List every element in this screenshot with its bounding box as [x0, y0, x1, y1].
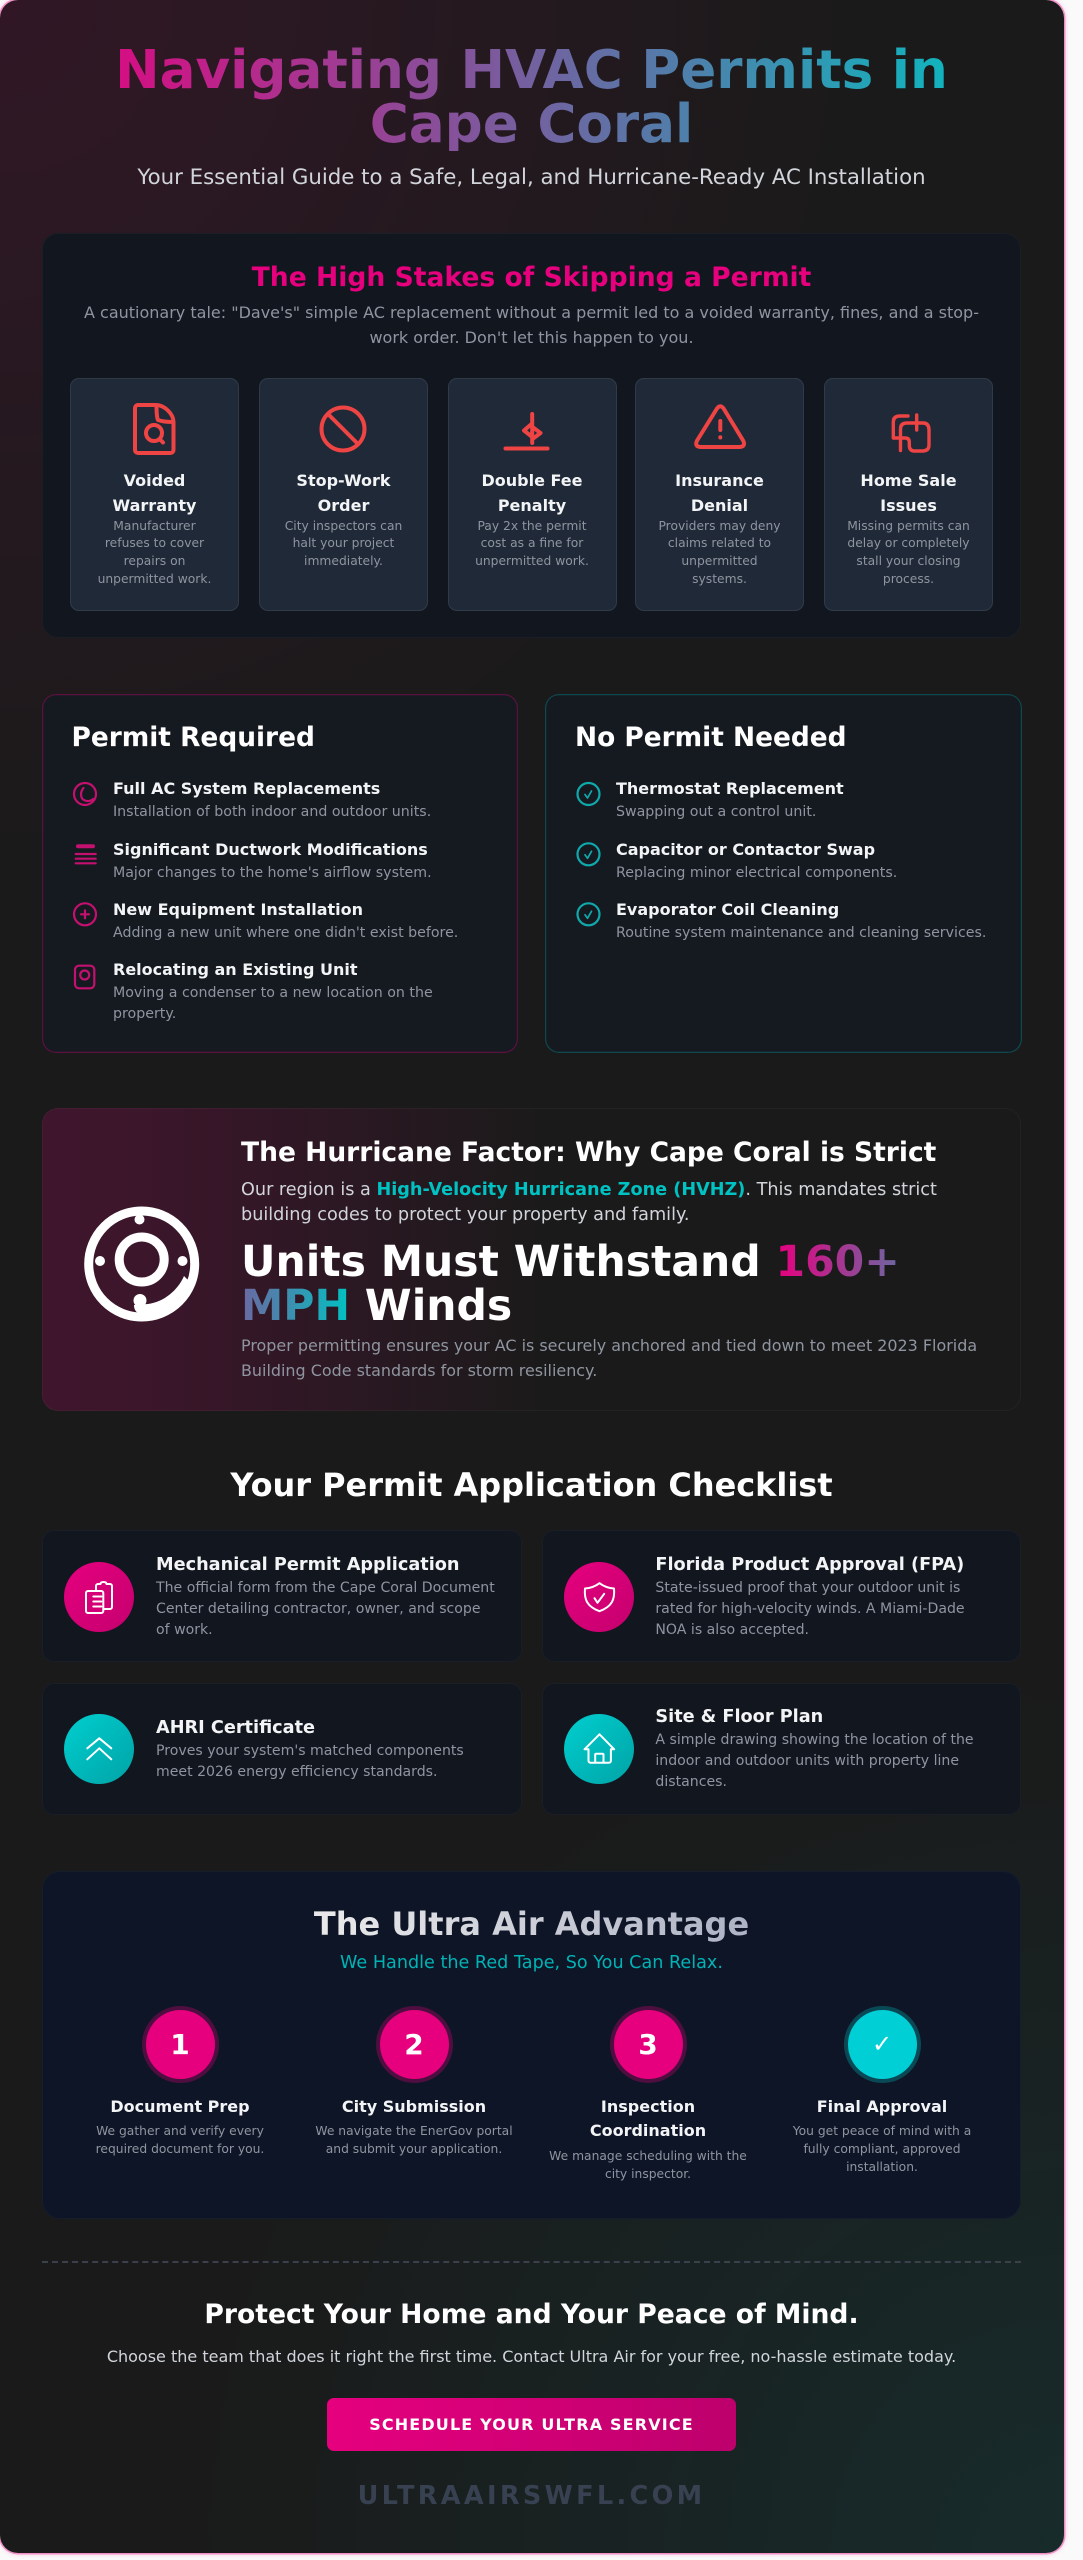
- card title: Penalty: [498, 496, 566, 514]
- card text: cost as a fine for: [481, 536, 583, 550]
- intro text: work order. Don't let this happen to you.: [369, 328, 694, 347]
- card text: indoor and outdoor units with property line: [655, 1753, 959, 1769]
- card title: [296, 470, 391, 514]
- card title: AHRI Certificate: [156, 1718, 315, 1738]
- heading: high stakes: The High Stakes of Skipping a Permit: [252, 262, 811, 292]
- item text: Installation of both indoor and outdoor units.: [113, 804, 431, 820]
- card: florida product approval: [542, 1530, 1021, 1662]
- heading: checklist: Your Permit Application Checklist: [230, 1466, 833, 1504]
- heading: hurricane factor: The Hurricane Factor: Why Cape Coral is Strict: [241, 1137, 936, 1168]
- text: building code: [241, 1336, 977, 1380]
- panel: high stakes: [42, 233, 1021, 638]
- card title: Site & Floor Plan: [655, 1707, 823, 1727]
- title: Navigating HVAC Permits in: [115, 38, 948, 100]
- text: call to action: Choose the team that does it right the first time. Contact Ultra Air for your free, no-hassle estimate today.: [107, 2347, 956, 2366]
- card text: State-issued proof that your outdoor unit is: [655, 1580, 960, 1596]
- item title: Thermostat Replacement: [616, 778, 844, 798]
- step number: 1: [170, 2028, 190, 2061]
- heading: advantage: The Ultra Air Advantage: [314, 1905, 749, 1943]
- step number: [146, 2010, 214, 2079]
- intro text: A cautionary tale: "Dave's" simple AC replacement without a permit led to a voided warranty, fines, and a stop-: [84, 303, 979, 322]
- intro text: [84, 303, 979, 347]
- card text: [156, 1743, 464, 1780]
- step 3: [538, 2007, 758, 2207]
- card title: [481, 470, 582, 514]
- card title: Denial: [691, 496, 748, 514]
- card title: Issues: [880, 496, 937, 514]
- item: capacitor: [576, 840, 897, 881]
- step title: City Submission: [342, 2097, 486, 2116]
- text: building code: Building Code standards for storm resiliency.: [241, 1361, 597, 1380]
- step text: and submit your application.: [326, 2142, 502, 2156]
- card text: repairs on: [124, 554, 185, 568]
- card text: [98, 519, 211, 586]
- card: stop-work order: [259, 378, 428, 610]
- card title: Florida Product Approval (FPA): [655, 1555, 964, 1575]
- card: AHRI certificate: [42, 1683, 522, 1815]
- step text: [304, 2123, 524, 2159]
- item title: Relocating an Existing Unit: [113, 960, 358, 978]
- step title: Final Approval: [817, 2097, 947, 2116]
- item title: New Equipment Installation: [113, 900, 363, 918]
- icon: shield: [564, 1562, 634, 1632]
- icon: duct lines: [74, 844, 97, 864]
- icon: cycle: [72, 782, 98, 806]
- card text: Manufacturer: [113, 519, 196, 533]
- step text: [70, 2123, 290, 2159]
- item: ductwork: [74, 840, 432, 881]
- stat: 160+ mph: [241, 1238, 900, 1331]
- step title: Inspection: [601, 2097, 695, 2116]
- card title: Order: [318, 496, 369, 514]
- item text: Replacing minor electrical components.: [616, 865, 897, 881]
- card text: systems.: [692, 572, 747, 586]
- step text: You get peace of mind with a: [793, 2124, 971, 2138]
- card text: unpermitted: [681, 554, 758, 568]
- step text: We navigate the EnerGov portal: [315, 2124, 513, 2138]
- panel: hurricane factor: [42, 1108, 1021, 1411]
- card text: Missing permits can: [847, 519, 970, 533]
- text: building code: Proper permitting ensures your AC is securely anchored and tied down to meet 2023 Florida: [241, 1336, 977, 1355]
- card text: delay or completely: [847, 536, 970, 550]
- card text: [655, 1580, 965, 1638]
- step title: [538, 2095, 758, 2144]
- button: schedule: SCHEDULE YOUR ULTRA SERVICE: [369, 2414, 694, 2434]
- card: double fee penalty: [448, 378, 616, 610]
- step title: Document Prep: [110, 2097, 250, 2116]
- card text: unpermitted work.: [475, 554, 589, 568]
- icon: warning triangle: [694, 404, 746, 449]
- item text: property.: [113, 1006, 176, 1022]
- card text: [658, 519, 781, 586]
- card text: The official form from the Cape Coral Document: [156, 1580, 495, 1596]
- step 1: [96, 2006, 264, 2156]
- item text: Swapping out a control unit.: [616, 804, 816, 820]
- text: HVHZ explanation: [241, 1180, 937, 1225]
- step text: fully compliant, approved: [803, 2142, 961, 2156]
- item text: [113, 985, 433, 1022]
- card title: Home Sale: [860, 470, 957, 490]
- step text: [538, 2148, 758, 2184]
- step number: [380, 2010, 448, 2079]
- icon: condenser: [74, 964, 96, 990]
- card title: Mechanical Permit Application: [156, 1555, 460, 1575]
- card text: [475, 519, 589, 568]
- card text: Pay 2x the permit: [477, 519, 587, 533]
- step text: [772, 2123, 992, 2176]
- text: HVHZ explanation: Our region is a High-Velocity Hurricane Zone (HVHZ). This mandates strict: [241, 1180, 937, 1200]
- card text: rated for high-velocity winds. A Miami-Dade: [655, 1601, 965, 1617]
- icon: document search: [133, 403, 176, 455]
- item: full AC replacement: [72, 778, 431, 820]
- panel: no permit needed: [545, 694, 1022, 1053]
- item text: Major changes to the home's airflow system.: [113, 865, 432, 881]
- card text: [655, 1732, 974, 1790]
- item title: Significant Ductwork Modifications: [113, 840, 428, 858]
- step 2: [304, 2007, 524, 2207]
- panel: permit required: [42, 694, 518, 1053]
- card text: Providers may deny: [658, 519, 781, 533]
- item text: Adding a new unit where one didn't exist before.: [113, 925, 458, 941]
- card text: stall your closing: [856, 554, 961, 568]
- card title: [113, 470, 196, 514]
- subtitle: Your Essential Guide to a Safe, Legal, and Hurricane-Ready AC Installation: [137, 165, 926, 190]
- card text: immediately.: [304, 554, 383, 568]
- step text: We manage scheduling with the: [549, 2149, 747, 2163]
- item: new equipment: [72, 900, 458, 941]
- card text: [847, 519, 970, 586]
- icon: hurricane: [84, 1206, 200, 1322]
- title: [42, 42, 1021, 150]
- card title: Double Fee: [481, 470, 582, 490]
- text: HVHZ explanation: building codes to protect your property and family.: [241, 1205, 690, 1225]
- item title: Capacitor or Contactor Swap: [616, 840, 875, 858]
- card: insurance denial: [635, 378, 804, 610]
- icon: prohibited: [320, 406, 366, 452]
- card text: process.: [883, 572, 934, 586]
- step number: 2: [404, 2028, 424, 2061]
- footer website: ULTRAAIRSWFL.COM: [358, 2480, 705, 2510]
- card text: claims related to: [668, 536, 771, 550]
- step number: 3: [638, 2028, 658, 2061]
- stat: 160+ mph: MPH Winds: [241, 1282, 512, 1331]
- stat: 160+ mph: Units Must Withstand 160+: [241, 1238, 900, 1287]
- card text: meet 2026 energy efficiency standards.: [156, 1764, 437, 1780]
- card title: Warranty: [113, 496, 196, 514]
- card title: Stop-Work: [296, 470, 391, 490]
- icon: check circle: [576, 782, 601, 806]
- step text: city inspector.: [605, 2167, 691, 2181]
- card: home sale issues: [824, 378, 993, 610]
- icon: house: [564, 1714, 634, 1784]
- item title: Evaporator Coil Cleaning: [616, 900, 839, 918]
- icon: chevrons up: [64, 1714, 134, 1784]
- panel: ultra air advantage: [42, 1871, 1021, 2219]
- step 4: [772, 2007, 992, 2207]
- card text: unpermitted work.: [98, 572, 211, 586]
- heading: no permit needed: No Permit Needed: [575, 722, 847, 753]
- item: relocating unit: [74, 960, 433, 1022]
- step text: We gather and verify every: [96, 2124, 264, 2138]
- card text: Center detailing contractor, owner, and scope: [156, 1601, 481, 1617]
- heading: advantage: [42, 1902, 1021, 1946]
- item text: Moving a condenser to a new location on the: [113, 985, 433, 1001]
- icon: clipboard: [64, 1562, 134, 1632]
- card title: Insurance: [675, 470, 764, 490]
- card title: [675, 470, 764, 514]
- icon: home sale: [892, 413, 931, 453]
- subheading: We Handle the Red Tape, So You Can Relax.: [340, 1952, 723, 1972]
- card text: Proves your system's matched components: [156, 1743, 464, 1759]
- card: voided warranty: [70, 378, 239, 610]
- button: schedule: [327, 2398, 736, 2451]
- card text: City inspectors can: [285, 519, 402, 533]
- step title: Coordination: [590, 2121, 706, 2140]
- step text: required document for you.: [96, 2142, 264, 2156]
- card text: NOA is also accepted.: [655, 1622, 809, 1638]
- item title: Full AC System Replacements: [113, 778, 380, 798]
- step text: installation.: [846, 2160, 918, 2174]
- item: thermostat: [576, 778, 844, 820]
- title: Cape Coral: [370, 92, 693, 154]
- icon: fee: [504, 412, 550, 450]
- icon: check circle: [576, 842, 601, 866]
- item: coil cleaning: [576, 900, 986, 941]
- card text: [156, 1580, 495, 1638]
- item text: Routine system maintenance and cleaning services.: [616, 925, 986, 941]
- card text: refuses to cover: [105, 536, 204, 550]
- step check: [848, 2010, 916, 2079]
- card text: [285, 519, 402, 568]
- icon: plus circle: [72, 902, 98, 926]
- heading: call to action: Protect Your Home and Your Peace of Mind.: [204, 2299, 859, 2330]
- step number: [614, 2010, 682, 2079]
- card text: of work.: [156, 1622, 213, 1638]
- card title: Voided: [124, 470, 185, 490]
- step check: ✓: [872, 2030, 892, 2058]
- icon: check circle: [576, 902, 601, 926]
- card text: A simple drawing showing the location of the: [655, 1732, 974, 1748]
- card title: [860, 470, 957, 514]
- card text: halt your project: [293, 536, 394, 550]
- card text: distances.: [655, 1774, 727, 1790]
- card: site and floor plan: [542, 1683, 1021, 1815]
- heading: permit required: Permit Required: [72, 722, 315, 753]
- card: mechanical permit: [42, 1530, 522, 1662]
